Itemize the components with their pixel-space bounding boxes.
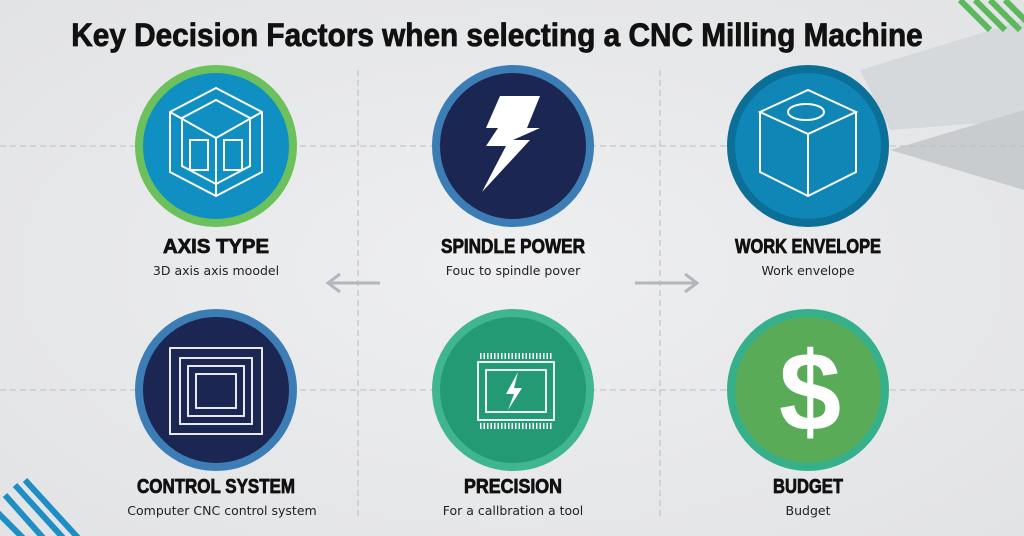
icon: cube frame [170,88,262,196]
panel: precision [436,313,590,518]
panel: budget: Budget [786,503,831,518]
panel: control system [127,313,317,518]
panel: precision: For a callbration a tool [443,503,583,518]
panel: work envelope [731,69,885,278]
panel: work envelope: WORK ENVELOPE [735,236,881,258]
icon: box [760,90,856,196]
icon: lightning [482,96,540,192]
panel: axis type: 3D axis axis moodel [153,263,279,278]
panel: control system: Computer CNC control system [127,503,317,518]
icon: dollar: $ [779,329,841,454]
arrow right [635,274,697,292]
panel: precision: PRECISION [464,476,562,498]
panel: budget [731,313,885,518]
light beam decoration [860,20,1024,190]
panel: spindle power [436,69,590,278]
panel: control system: CONTROL SYSTEM [137,476,295,498]
arrow left [328,274,380,292]
panel: spindle power: Fouc to spindle pover [446,263,581,278]
icon: chip bolt [478,356,554,426]
blue stripes bottom-left [0,480,80,536]
panel: axis type [139,69,293,278]
label: AXIS TYPE [163,236,269,258]
icon: chip frame [170,348,262,434]
panel: work envelope: Work envelope [761,263,855,278]
panel: spindle power: SPINDLE POWER [441,236,585,258]
green stripes top-right [960,0,1024,30]
panel: budget: BUDGET [773,476,843,498]
title: Key Decision Factors when selecting a CNC Milling Machine [71,18,923,54]
